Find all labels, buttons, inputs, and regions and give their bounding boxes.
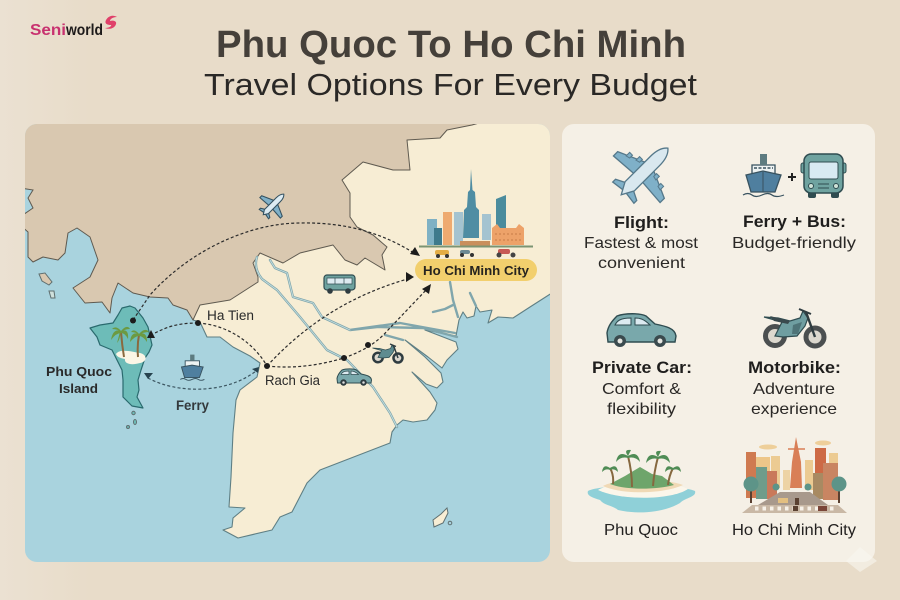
icon: map bus	[324, 275, 355, 294]
option: ferry and bus: Ferry + Bus:	[743, 212, 846, 231]
label: Rach Gia: Rach Gia	[265, 373, 320, 388]
option: flight: Flight:	[614, 213, 669, 232]
icon: car	[607, 314, 676, 347]
destination: Ho Chi Minh City	[732, 437, 856, 539]
label: Phu Quoc Island: Island	[59, 381, 98, 396]
option: ferry and bus	[732, 154, 856, 252]
option: ferry and bus: Budget-friendly	[732, 235, 856, 252]
icon: plus	[788, 173, 796, 181]
icon: ship	[743, 154, 784, 196]
label: Phu Quoc Island	[46, 366, 112, 393]
illustration: city street	[742, 437, 847, 513]
icon: map plane	[258, 194, 284, 220]
Cambodia land	[20, 120, 490, 320]
Phu Quoc island	[90, 306, 152, 408]
option: private car: Comfort &	[602, 381, 681, 398]
subtitle: Travel Options For Every Budget	[204, 67, 697, 102]
destination: Phu Quoc	[588, 450, 695, 539]
panel: travel options	[562, 124, 875, 562]
route: flight	[133, 223, 414, 320]
logo: Seniworld: Seni	[30, 22, 66, 39]
destination: Ho Chi Minh City: Ho Chi Minh City	[732, 522, 856, 539]
option: flight	[584, 125, 699, 272]
logo: Seniworld: world	[65, 22, 103, 39]
icon: plane	[598, 125, 691, 218]
arrowheads and stops	[130, 247, 431, 379]
option: flight: Fastest & most	[584, 235, 699, 252]
option: private car: flexibility	[607, 401, 676, 418]
route: Ha Tien to island and Rach Gia	[153, 323, 267, 366]
route: ferry	[148, 371, 256, 389]
label pill: Ho Chi Minh City	[415, 259, 537, 281]
option: motorbike: Motorbike:	[748, 358, 841, 377]
icon: motorbike	[764, 309, 824, 346]
panel: route map	[20, 120, 555, 562]
rivers	[256, 257, 476, 427]
small islands	[39, 273, 452, 527]
icon: bus	[801, 154, 846, 198]
title: Phu Quoc To Ho Chi Minh	[216, 24, 686, 66]
label pill: Ho Chi Minh City: Ho Chi Minh City	[423, 263, 530, 278]
option: private car: Private Car:	[592, 358, 692, 377]
icon: map car	[337, 369, 372, 386]
watermark: sparkle	[846, 547, 877, 572]
illustration: tropical island	[588, 450, 695, 512]
label: Ferry: Ferry	[176, 398, 209, 413]
destination: Phu Quoc: Phu Quoc	[604, 522, 678, 539]
route: bus	[267, 278, 411, 366]
option: flight: convenient	[598, 255, 686, 272]
label: Phu Quoc Island: Phu Quoc	[46, 364, 112, 379]
route: car and motorbike	[267, 288, 428, 367]
icon: map motorbike	[372, 344, 402, 362]
option: motorbike: Adventure	[753, 381, 835, 398]
logo: Seniworld	[30, 16, 117, 39]
icon: map ship	[180, 355, 204, 380]
option: motorbike	[748, 309, 841, 418]
mainland Vietnam	[193, 120, 555, 538]
icon: Ho Chi Minh skyline	[419, 169, 533, 258]
option: private car	[592, 314, 692, 418]
option: motorbike: experience	[751, 401, 837, 418]
label: Ha Tien: Ha Tien	[207, 308, 254, 323]
